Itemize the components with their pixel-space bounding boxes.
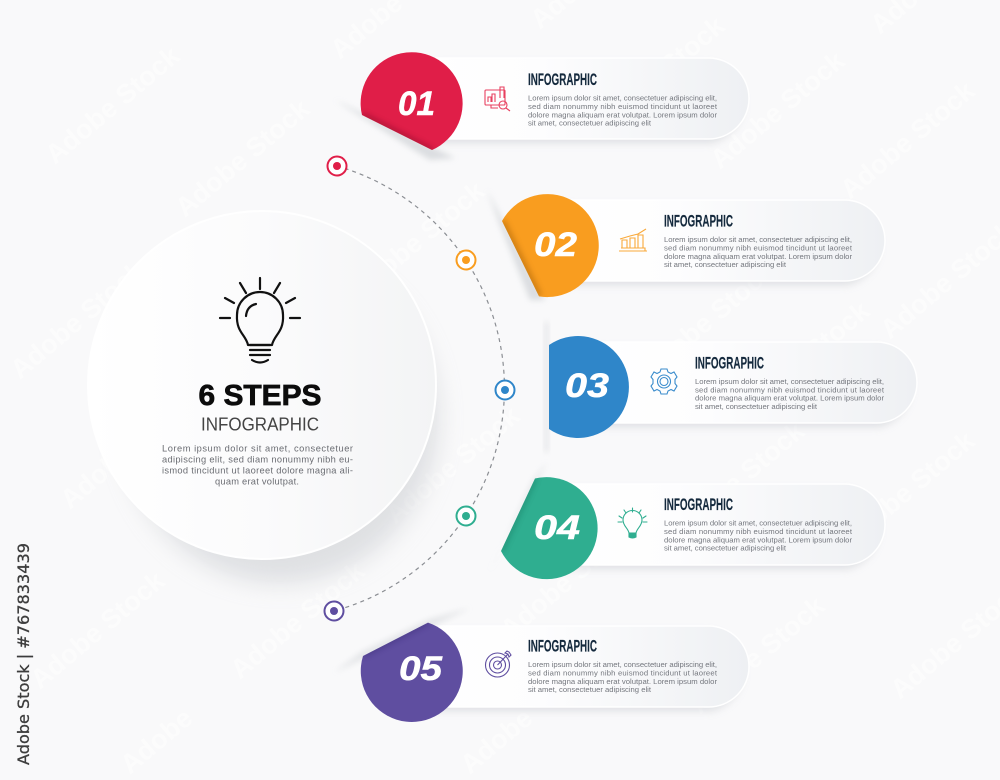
badge: 02: 02 (534, 226, 577, 264)
marker: step 2 (456, 250, 476, 270)
badge: 01 (361, 52, 463, 151)
badge: 05: 05 (399, 650, 443, 688)
watermark pattern: Adobe (455, 703, 538, 780)
marker: step 1 (328, 156, 346, 176)
text block (528, 660, 718, 694)
watermark pattern: Adobe Stock (665, 415, 811, 545)
panel: step 4 (501, 474, 884, 580)
text block: central description: adipiscing elit, sed diam nonummy nibh eu- (162, 454, 353, 464)
icon: small bulb (618, 508, 647, 538)
badge: 01: 01 (398, 85, 435, 123)
heading: 6 steps: 6 STEPS (198, 380, 322, 412)
watermark pattern: Adobe Stock (380, 400, 526, 530)
text block: sed diam nonummy nibh euismod tincidunt ut laoreet (695, 385, 885, 394)
text block: Lorem ipsum dolor sit amet, consectetuer adipiscing elit, (664, 235, 852, 244)
panel: step 3 (544, 322, 917, 452)
text block: sit amet, consectetuer adipiscing elit (695, 402, 818, 411)
text block: sit amet, consectetuer adipiscing elit (528, 685, 652, 694)
text block (664, 518, 853, 552)
panel: step 1 (335, 52, 749, 160)
watermark pattern: Adobe Stock (835, 425, 981, 555)
icon: chart and magnifier (485, 87, 510, 111)
stock id label: Adobe Stock | #767833439 (14, 543, 33, 765)
text block: dolore magna aliquam erat volutpat. Lorem ipsum dolor (528, 677, 717, 686)
text block: Lorem ipsum dolor sit amet, consectetuer adipiscing elit, (528, 660, 717, 669)
watermark pattern: Adobe Stock (495, 515, 641, 645)
dashed arc connector (334, 166, 504, 611)
text block: central description: ismod tincidunt ut laoreet dolore magna ali- (162, 466, 353, 476)
text block: Lorem ipsum dolor sit amet, consectetuer adipiscing elit, (664, 518, 852, 528)
watermark pattern: Adobe Stock (170, 93, 316, 223)
badge: 03: 03 (565, 367, 609, 405)
heading: INFOGRAPHIC (528, 71, 597, 89)
text block: dolore magna aliquam erat volutpat. Lorem ipsum dolor (664, 252, 852, 261)
text block: sed diam nonummy nibh euismod tincidunt ut laoreet (664, 244, 853, 253)
icon: growth bars (619, 229, 647, 251)
text block: Lorem ipsum dolor sit amet, consectetuer adipiscing elit, (695, 377, 884, 386)
text block: central description: Lorem ipsum dolor sit amet, consectetuer (162, 444, 353, 454)
text block: sit amet, consectetuer adipiscing elit (664, 544, 787, 552)
subheading: INFOGRAPHIC (201, 414, 319, 434)
text block: central description (162, 444, 353, 486)
text block: sed diam nonummy nibh euismod tincidunt ut laoreet (528, 669, 718, 678)
badge: 04: 04 (534, 509, 580, 547)
badge: 05 (361, 622, 463, 722)
text block (528, 94, 718, 128)
badge: 03 (549, 336, 629, 438)
badge: 04 (501, 477, 598, 579)
text block: sed diam nonummy nibh euismod tincidunt ut laoreet (664, 527, 853, 536)
panel: step 2 (487, 190, 885, 300)
watermark pattern: Adobe Stock (585, 10, 731, 140)
marker: step 4 (456, 506, 476, 526)
text block (664, 235, 853, 269)
marker: step 5 (324, 602, 344, 620)
watermark pattern: Adobe Stock (345, 175, 491, 305)
text block: sit amet, consectetuer adipiscing elit (664, 260, 787, 269)
watermark pattern: Adobe Stock (705, 45, 851, 175)
text block: Lorem ipsum dolor sit amet, consectetuer adipiscing elit, (528, 94, 717, 102)
text block: central description: quam erat volutpat. (215, 476, 299, 486)
text block: dolore magna aliquam erat volutpat. Lorem ipsum dolor (528, 110, 717, 119)
badge: 02 (502, 194, 599, 297)
watermark pattern: Adobe Stock (685, 590, 831, 720)
watermark pattern: Adobe Stock (730, 295, 876, 425)
icon: light bulb (220, 278, 300, 362)
text block: sed diam nonummy nibh euismod tincidunt ut laoreet (528, 102, 718, 111)
watermark pattern: Adobe Stock (635, 255, 781, 385)
heading: INFOGRAPHIC (695, 354, 764, 372)
watermark pattern: Adobe (115, 703, 198, 780)
heading: INFOGRAPHIC (528, 638, 597, 656)
text block: sit amet, consectetuer adipiscing elit (528, 118, 652, 128)
watermark pattern: Adobe Stock (225, 555, 371, 685)
watermark pattern: Adobe Stock (25, 565, 171, 695)
watermark pattern: Adobe Stock (835, 75, 981, 205)
watermark pattern: Adobe Stock (5, 255, 151, 385)
icon: target (486, 651, 511, 677)
watermark pattern: Adobe (180, 478, 263, 555)
text block: dolore magna aliquam erat volutpat. Lorem ipsum dolor (664, 535, 852, 544)
text block: dolore magna aliquam erat volutpat. Lorem ipsum dolor (695, 394, 884, 403)
watermark pattern: Adobe Stock (40, 40, 186, 170)
marker: step 3 (496, 380, 514, 400)
text block (695, 377, 885, 411)
heading: INFOGRAPHIC (664, 213, 733, 231)
watermark pattern: Adobe Stock (55, 385, 201, 515)
panel: step 5 (335, 608, 749, 722)
panel: central circle (88, 211, 438, 583)
heading: INFOGRAPHIC (664, 496, 733, 514)
icon: gear (651, 369, 677, 394)
